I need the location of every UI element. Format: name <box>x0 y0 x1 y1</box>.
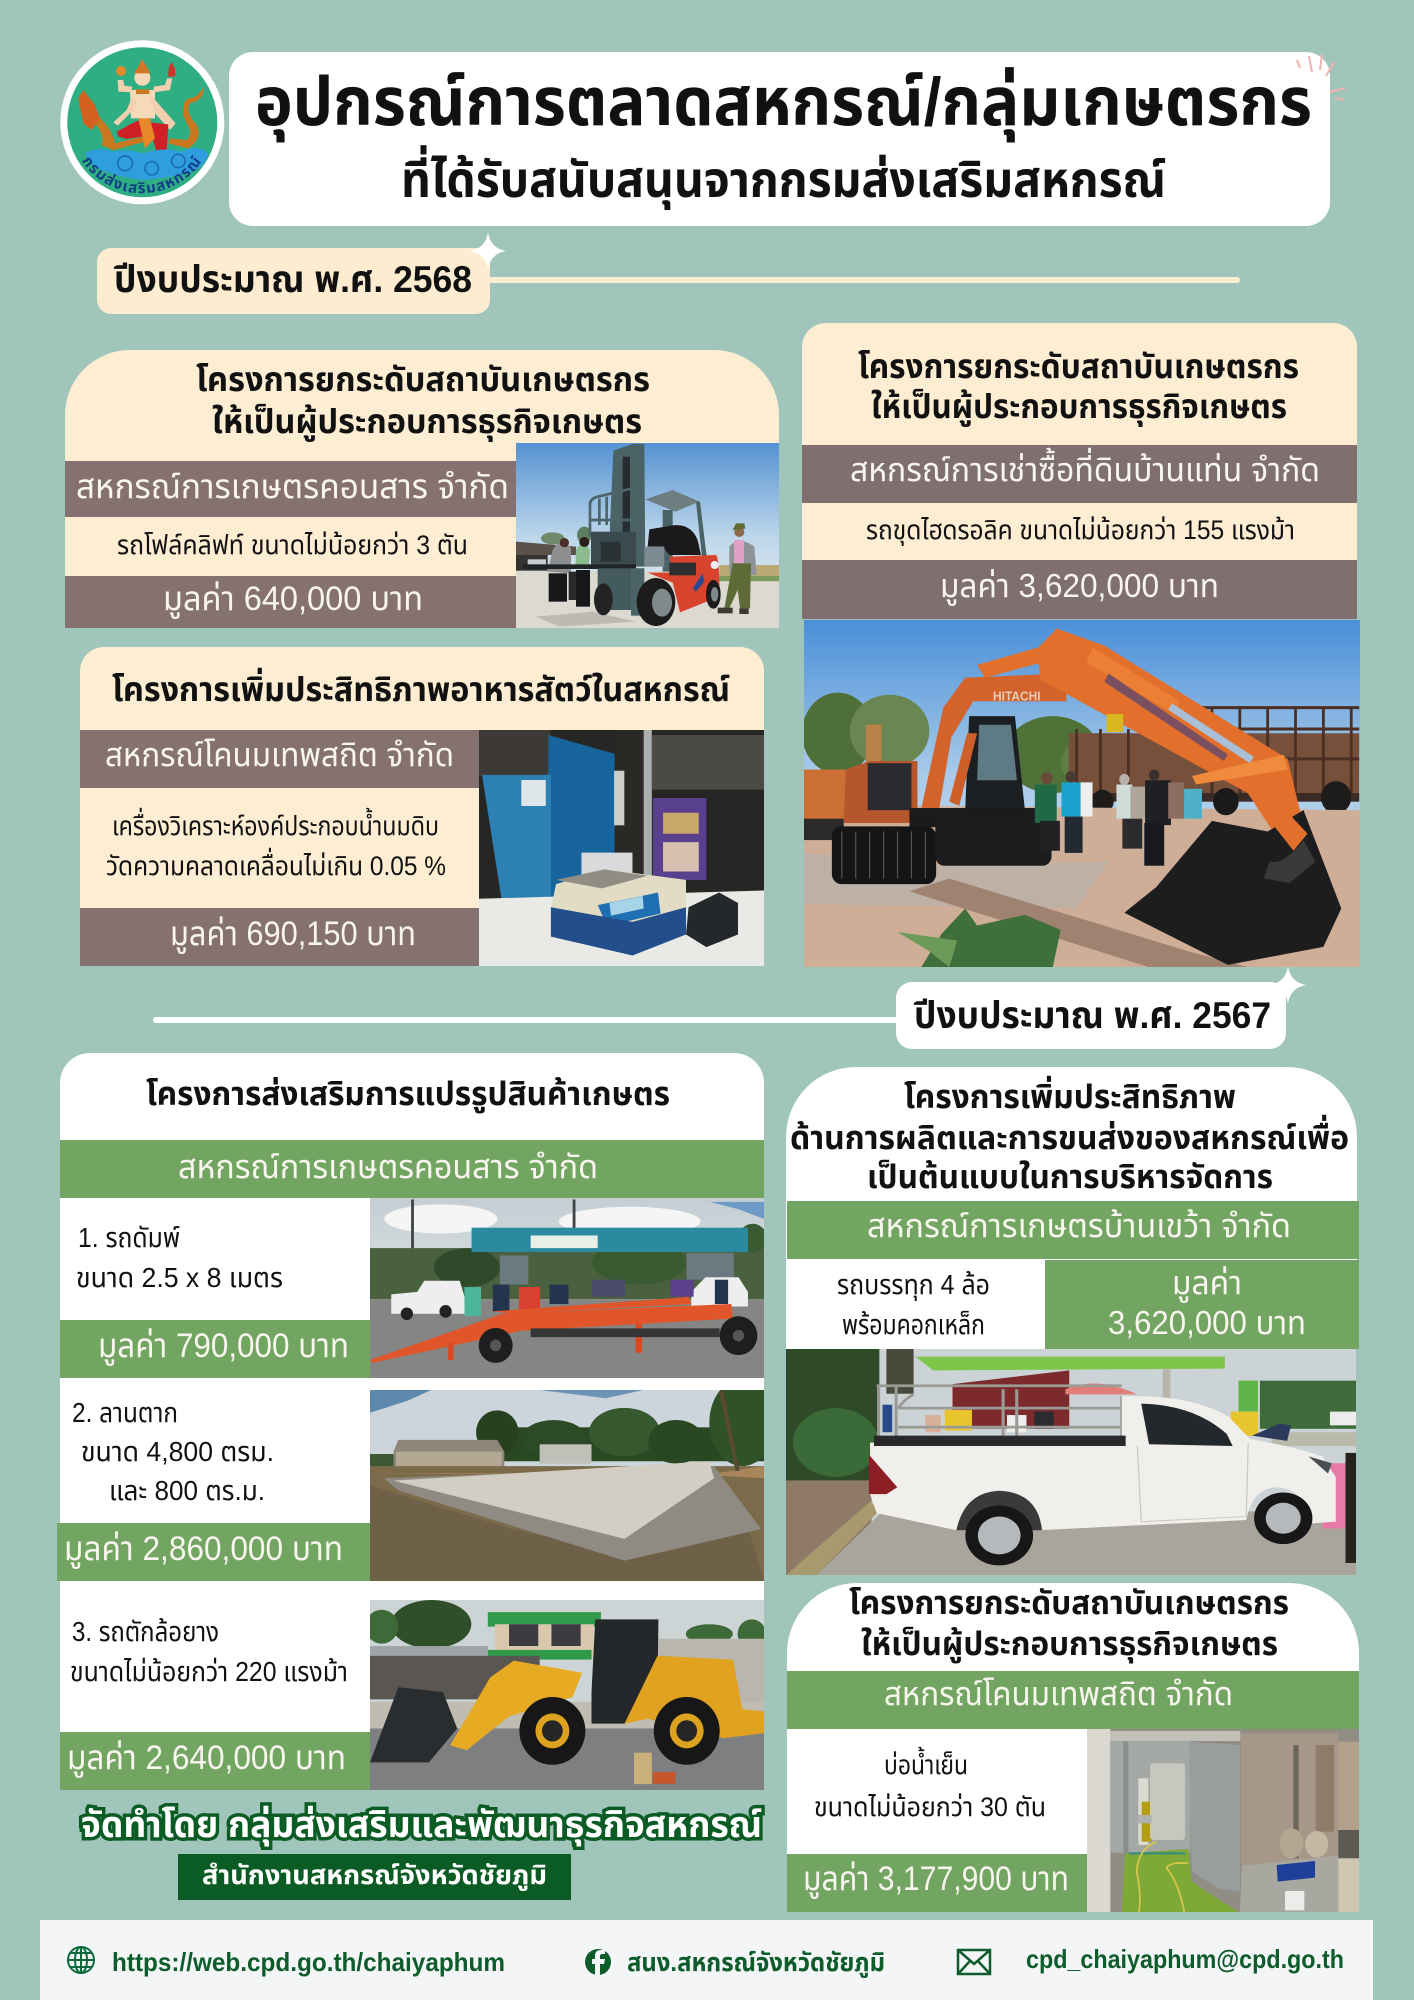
item 1: dump ramp: ขนาด 2.5 x 8 เมตร <box>76 1262 283 1293</box>
item 1: dump ramp: มูลค่า 790,000 บาท <box>98 1327 349 1366</box>
website: https://web.cpd.go.th/chaiyaphum <box>112 1947 505 1977</box>
value <box>65 576 516 628</box>
heading: ให้เป็นผู้ประกอบการธุรกิจเกษตร <box>861 1625 1278 1664</box>
equipment description <box>814 1746 1046 1822</box>
panel: pickup truck project <box>786 1067 1359 1575</box>
year label: ปีงบประมาณ พ.ศ. 2568 <box>114 259 472 300</box>
heading: โครงการส่งเสริมการแปรรูปสินค้าเกษตร <box>146 1075 670 1114</box>
credit: organised by <box>81 1804 762 1900</box>
equipment description: รถบรรทุก 4 ล้อ <box>837 1269 990 1301</box>
heading <box>849 1584 1289 1664</box>
title box <box>229 52 1345 226</box>
item 3: wheel loader: 3. รถตักล้อยาง <box>72 1616 219 1647</box>
panel: feed efficiency project <box>80 647 764 966</box>
equipment description: รถโฟล์คลิฟท์ ขนาดไม่น้อยกว่า 3 ตัน <box>117 530 468 560</box>
year divider 2568 <box>97 232 1240 314</box>
heading: ด้านการผลิตและการขนส่งของสหกรณ์เพื่อ <box>790 1114 1349 1156</box>
email: cpd_chaiyaphum@cpd.go.th <box>1026 1944 1344 1974</box>
mast <box>609 444 645 567</box>
heading: โครงการยกระดับสถาบันเกษตรกร <box>858 348 1299 386</box>
co-op name <box>60 1140 764 1198</box>
item 2: drying yard: มูลค่า 2,860,000 บาท <box>64 1530 343 1569</box>
heading: เป็นต้นแบบในการบริหารจัดการ <box>867 1158 1273 1195</box>
heading: โครงการยกระดับสถาบันเกษตรกร <box>196 361 650 399</box>
equipment description: วัดความคลาดเคลื่อนไม่เกิน 0.05 % <box>106 847 446 881</box>
panel: forklift project <box>65 350 779 628</box>
icon: globe <box>68 1947 94 1973</box>
body <box>648 555 719 612</box>
heading: โครงการยกระดับสถาบันเกษตรกร <box>849 1584 1289 1621</box>
equipment description: เครื่องวิเคราะห์องค์ประกอบน้ำนมดิบ <box>112 807 439 841</box>
equipment description: ขนาดไม่น้อยกว่า 30 ตัน <box>814 1792 1046 1822</box>
heading: ให้เป็นผู้ประกอบการธุรกิจเกษตร <box>212 403 642 442</box>
icon: facebook <box>585 1949 611 1976</box>
value: มูลค่า 3,620,000 บาท <box>940 567 1219 606</box>
photo: drying yard <box>370 1390 764 1581</box>
co-op name <box>65 461 516 517</box>
equipment description <box>106 807 446 881</box>
co-op name: สหกรณ์โคนมเทพสถิต จำกัด <box>884 1675 1233 1712</box>
item 3: wheel loader: มูลค่า 2,640,000 บาท <box>67 1739 346 1778</box>
decorative burst <box>1297 54 1345 100</box>
item 2: drying yard <box>57 1397 370 1581</box>
year label: ปีงบประมาณ พ.ศ. 2567 <box>914 995 1271 1036</box>
co-op name <box>787 1201 1359 1259</box>
man <box>729 541 757 575</box>
provincial office badge: สำนักงานสหกรณ์จังหวัดชัยภูมิ <box>202 1860 547 1891</box>
co-op name: สหกรณ์โคนมเทพสถิต จำกัด <box>105 736 454 773</box>
item 3: wheel loader: ขนาดไม่น้อยกว่า 220 แรงม้า <box>70 1656 348 1687</box>
item 2: drying yard: และ 800 ตร.ม. <box>109 1475 265 1506</box>
heading <box>196 361 650 442</box>
co-op name: สหกรณ์การเกษตรคอนสาร จำกัด <box>76 468 509 506</box>
co-op name <box>80 730 479 788</box>
photo: excavator <box>804 620 1360 967</box>
icon: envelope <box>958 1950 990 1974</box>
photo: forklift <box>516 443 779 628</box>
heading: โครงการเพิ่มประสิทธิภาพ <box>904 1075 1236 1115</box>
value <box>787 1854 1087 1912</box>
item 1: dump ramp: 1. รถดัมพ์ <box>78 1222 180 1253</box>
equipment description: บ่อน้ำเย็น <box>884 1746 968 1780</box>
co-op name: สหกรณ์การเช่าซื้อที่ดินบ้านแท่น จำกัด <box>850 447 1320 488</box>
photo: dump ramp <box>370 1198 764 1378</box>
heading: ให้เป็นผู้ประกอบการธุรกิจเกษตร <box>871 388 1287 427</box>
value <box>1045 1260 1359 1349</box>
equipment description <box>837 1269 990 1340</box>
equipment description: พร้อมคอกเหล็ก <box>842 1309 985 1340</box>
value: มูลค่า 640,000 บาท <box>163 580 423 619</box>
co-op name <box>787 1671 1359 1729</box>
photo: wheel loader <box>370 1600 764 1790</box>
item 2: drying yard: 2. ลานตาก <box>72 1397 178 1428</box>
credit: organised by: จัดทำโดย กลุ่มส่งเสริมและพัฒนาธุรกิจสหกรณ์ <box>81 1804 762 1846</box>
value <box>802 560 1357 619</box>
equipment description: รถขุดไฮดรอลิค ขนาดไม่น้อยกว่า 155 แรงม้า <box>866 515 1295 546</box>
photo: chilled water tanks <box>1087 1729 1359 1912</box>
operator guard <box>645 490 699 512</box>
photo: pickup truck <box>786 1349 1356 1575</box>
title line 2: ที่ได้รับสนับสนุนจากกรมส่งเสริมสหกรณ์ <box>401 145 1166 210</box>
footer: contact bar <box>40 1920 1373 2000</box>
heading: โครงการเพิ่มประสิทธิภาพอาหารสัตว์ในสหกรณ์ <box>112 667 730 709</box>
value: มูลค่า 3,177,900 บาท <box>803 1860 1069 1899</box>
item 2: drying yard: ขนาด 4,800 ตรม. <box>81 1436 274 1467</box>
value: 3,620,000 บาท <box>1108 1304 1306 1341</box>
year divider 2567 <box>153 966 1306 1049</box>
heading <box>858 348 1299 427</box>
heading <box>790 1075 1349 1195</box>
item 1: dump ramp <box>60 1222 370 1378</box>
people <box>548 542 571 573</box>
value: มูลค่า 690,150 บาท <box>170 915 416 954</box>
panel: chilled water tank project <box>787 1583 1359 1912</box>
value: มูลค่า <box>1172 1264 1242 1303</box>
photo: milk analyzer <box>479 730 764 966</box>
provincial office badge <box>178 1854 571 1900</box>
co-op name: สหกรณ์การเกษตรบ้านเขว้า จำกัด <box>867 1207 1291 1244</box>
panel: excavator project <box>802 323 1360 967</box>
panel: agricultural processing project <box>57 1053 775 1790</box>
co-op name <box>802 445 1357 503</box>
logo: Cooperative Promotion Department seal: กรมส่งเสริมสหกรณ์ <box>82 154 201 194</box>
logo: Cooperative Promotion Department seal <box>60 40 224 204</box>
title line 1: อุปกรณ์การตลาดสหกรณ์/กลุ่มเกษตรกร <box>255 64 1312 143</box>
photo: excavator: HITACHI <box>993 689 1041 703</box>
co-op name: สหกรณ์การเกษตรคอนสาร จำกัด <box>178 1148 598 1185</box>
facebook page: สนง.สหกรณ์จังหวัดชัยภูมิ <box>627 1947 885 1978</box>
value <box>80 908 479 966</box>
item 3: wheel loader <box>60 1616 370 1790</box>
